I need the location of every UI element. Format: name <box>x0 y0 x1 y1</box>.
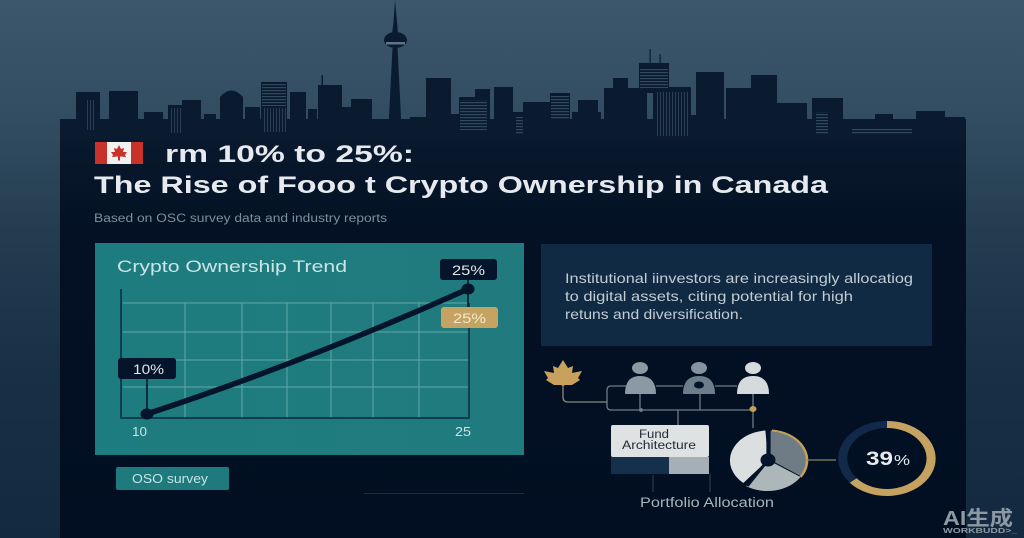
icon: maple leaf <box>544 360 582 386</box>
end marker: 25% <box>440 259 497 307</box>
title: The Rise of Fooo t Crypto Ownership in Canada <box>94 172 829 199</box>
donut gauge: 39%: 39 <box>866 449 893 470</box>
source tag: OSO survey <box>116 467 229 490</box>
skyline window details <box>85 68 912 136</box>
portfolio allocation label: Portfolio Allocation <box>640 495 774 510</box>
icon: person 2 <box>683 362 715 394</box>
chart axes <box>121 289 469 418</box>
fund architecture box <box>611 425 710 492</box>
gold badge: 25% <box>441 307 498 328</box>
panel: institutional investors text: Institutional iinvestors are increasingly allocatiog <box>565 270 913 286</box>
donut gauge: 39% <box>843 424 931 492</box>
icon: person 1 <box>625 362 656 394</box>
gold badge: 25%: 25% <box>453 310 486 326</box>
fund architecture box: Fund <box>639 429 669 441</box>
watermark: WORKBUDD>_ <box>943 526 1018 535</box>
flag icon: Canada <box>95 142 143 164</box>
title <box>94 141 829 199</box>
x axis label 25: 25 <box>455 425 471 439</box>
pie chart <box>730 430 807 491</box>
watermark <box>943 506 1018 535</box>
donut gauge: 39%: % <box>894 452 910 469</box>
watermark: AI生成 <box>943 506 1013 530</box>
panel: institutional investors text: retuns and diversification. <box>565 306 743 322</box>
panel: institutional investors text: to digital assets, citing potential for high <box>565 288 853 304</box>
end marker: 25%: 25% <box>452 262 485 278</box>
network connector lines <box>563 385 753 428</box>
fund architecture box: Architecture <box>622 440 696 452</box>
title: rm 10% to 25%: <box>165 141 414 168</box>
pie to donut connector <box>807 459 836 461</box>
dark content panel <box>60 125 966 538</box>
start marker: 10%: 10% <box>133 361 164 377</box>
city skyline <box>60 49 966 139</box>
x axis label 10: 10 <box>132 425 147 439</box>
subtitle: Based on OSC survey data and industry reports <box>94 213 387 225</box>
chart heading: Crypto Ownership Trend <box>117 258 347 276</box>
icon: CN tower <box>384 0 407 137</box>
panel: institutional investors text <box>541 244 932 346</box>
panel: crypto ownership trend chart <box>95 243 524 455</box>
start marker: 10% <box>118 358 176 420</box>
source tag: OSO survey: OSO survey <box>132 472 209 486</box>
trend line <box>147 289 468 414</box>
icon: person 3 <box>737 362 769 394</box>
